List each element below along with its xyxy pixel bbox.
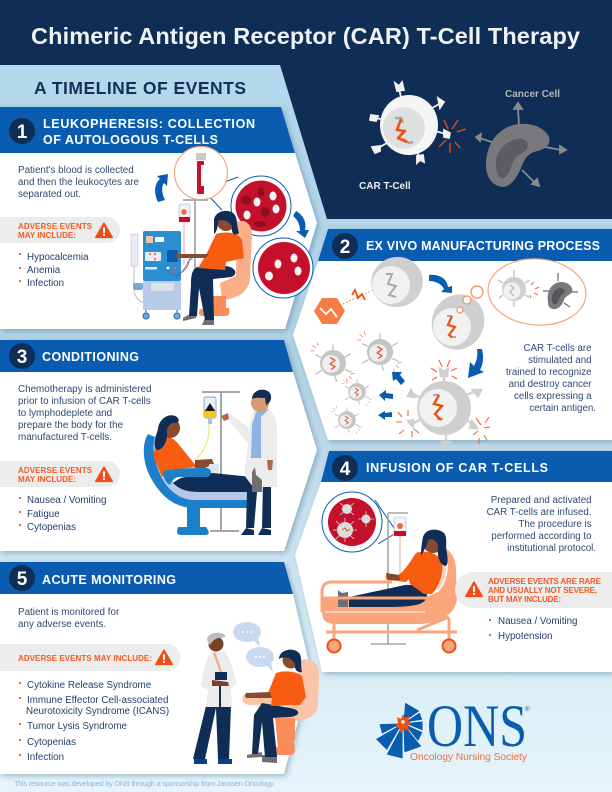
panel body — [293, 229, 612, 440]
text block: Patient's blood is collected — [18, 165, 134, 176]
text block: separated out. — [18, 189, 81, 200]
list: adverse events — [489, 616, 578, 642]
text block: Prepared and activated — [491, 495, 592, 506]
text block: CAR T-cells are infused. — [487, 507, 592, 518]
label: CAR T-Cell: CAR T-Cell — [359, 181, 411, 192]
heading: OF AUTOLOGOUS T-CELLS — [43, 133, 218, 147]
text block: trained to recognize — [506, 367, 592, 378]
logo: ONS — [375, 693, 530, 763]
adverse events pill: MAY INCLUDE: — [18, 475, 76, 484]
list: adverse events: Anemia — [27, 265, 61, 276]
label: Cancer Cell: Cancer Cell — [505, 89, 560, 100]
cell 2 with vesicles — [423, 286, 493, 358]
list: adverse events — [19, 680, 169, 763]
adverse events pill — [0, 461, 120, 487]
text block: Chemotherapy is administered — [18, 384, 152, 395]
clinician — [221, 390, 277, 535]
text block: certain antigen. — [529, 403, 596, 414]
number badge — [9, 118, 35, 144]
bed frame — [322, 582, 457, 652]
magnified blood sample 1 — [231, 176, 291, 236]
footer credit: This resource was developed by ONS through a sponsorship from Janssen Oncology. — [14, 779, 275, 788]
cell 1 — [364, 250, 430, 314]
panel 4: infusion of CAR T-cells — [295, 451, 612, 672]
patient — [338, 530, 448, 607]
icon: CAR T-cell — [370, 82, 466, 163]
chair — [242, 659, 319, 755]
text block: and destroy cancer — [509, 379, 592, 390]
list: adverse events: Fatigue — [27, 509, 60, 520]
text block: Patient is monitored for — [18, 607, 120, 618]
list: adverse events: Cytopenias — [27, 522, 76, 533]
panel body — [0, 340, 317, 551]
bed backrest — [322, 548, 457, 624]
arrow — [429, 275, 452, 293]
list: adverse events — [19, 495, 107, 533]
heading: a timeline of events: A TIMELINE OF EVENTS — [34, 78, 246, 98]
adverse events pill — [0, 217, 120, 243]
text block: any adverse events. — [18, 619, 106, 630]
IV pole and bag — [194, 392, 240, 531]
logo: ONS: ® — [525, 706, 530, 713]
text block: and then the leukocytes are — [18, 177, 139, 188]
heading: CONDITIONING — [42, 350, 139, 364]
IV pole and bag — [371, 513, 408, 644]
clinician — [193, 633, 237, 764]
icon: cancer cell — [476, 103, 566, 187]
chair — [199, 221, 252, 316]
list: adverse events: Tumor Lysis Syndrome — [27, 721, 128, 732]
number badge: 1 — [17, 122, 28, 143]
list: adverse events: Infection — [27, 752, 64, 763]
text block: CAR T-cells are — [523, 343, 592, 354]
illustration: patient and clinician with chemotherapy — [144, 390, 277, 535]
panel 5: acute monitoring — [0, 562, 319, 774]
heading: INFUSION OF CAR T-CELLS — [366, 461, 548, 475]
apheresis machine — [131, 231, 181, 319]
title: Chimeric Antigen Receptor (CAR) T-Cell Therapy — [31, 23, 580, 49]
illustration: clinician talking with patient — [193, 622, 319, 764]
list: adverse events: Immune Effector Cell-associated — [27, 695, 168, 706]
adverse events pill: MAY INCLUDE: — [18, 231, 76, 240]
magnifier: blood tube — [174, 146, 238, 210]
diagram: manufacturing steps — [311, 250, 588, 447]
heading: ACUTE MONITORING — [42, 573, 176, 587]
adverse events pill: BUT MAY INCLUDE: — [488, 595, 561, 604]
list: adverse events: Infection — [27, 278, 64, 289]
adverse events pill: ADVERSE EVENTS MAY INCLUDE: — [18, 654, 152, 663]
number badge — [9, 565, 35, 591]
panel body — [295, 451, 612, 672]
adverse events pill: ADVERSE EVENTS — [18, 222, 93, 231]
society name: Oncology Nursing Society — [410, 752, 528, 763]
text block: manufactured T-cells. — [18, 432, 112, 443]
magnified blood sample 2 — [253, 238, 313, 298]
patient — [245, 650, 306, 763]
icon: ONS fan mark — [375, 702, 423, 759]
IV pole and bag — [179, 200, 208, 312]
icon: antigen receptor gene hexagon — [314, 285, 383, 324]
illustration: patient in bed receiving infusion — [322, 492, 457, 652]
number badge: 4 — [340, 459, 351, 480]
header bar — [0, 562, 293, 594]
text block: to lymphodeplete and — [18, 408, 112, 419]
small arrows — [378, 372, 405, 420]
callout: T-cell recognizes cancer cell — [486, 256, 588, 328]
number badge — [332, 455, 358, 481]
arrow down — [293, 211, 309, 238]
text block: cells expressing a — [514, 391, 592, 402]
header bar — [318, 229, 612, 261]
text block: institutional protocol. — [507, 543, 596, 554]
header bar — [321, 451, 612, 482]
adverse events pill — [0, 644, 180, 671]
activated T-cell — [396, 360, 490, 447]
arrow — [468, 349, 484, 378]
header bar — [0, 107, 295, 153]
number badge — [9, 343, 35, 369]
number badge: 2 — [340, 237, 350, 258]
wordmark: ONS — [427, 693, 527, 759]
list: adverse events: Cytopenias — [27, 737, 76, 748]
adverse events pill: ADVERSE EVENTS ARE RARE — [488, 577, 602, 586]
header: dark navy banner — [0, 0, 612, 219]
adverse events pill — [455, 572, 612, 608]
text block: The procedure is — [518, 519, 592, 530]
speech bubbles — [233, 622, 274, 672]
illustration: apheresis — [131, 146, 313, 325]
list: adverse events: Nausea / Vomiting — [27, 495, 107, 506]
panel 3: conditioning — [0, 340, 317, 551]
adverse events pill: ADVERSE EVENTS — [18, 466, 93, 475]
text block: prior to infusion of CAR T-cells — [18, 396, 151, 407]
patient — [168, 211, 244, 325]
panel body — [0, 562, 311, 774]
list: adverse events: Hypocalcemia — [27, 252, 89, 263]
magnified CAR T-cells in blood — [322, 492, 396, 552]
list: adverse events: Hypotension — [498, 631, 552, 642]
heading: LEUKOPHERESIS: COLLECTION — [43, 117, 255, 131]
text block: performed according to — [491, 531, 592, 542]
adverse events pill: AND USUALLY NOT SEVERE, — [488, 586, 597, 595]
number badge: 5 — [17, 569, 28, 590]
panel body — [0, 107, 317, 329]
panel 1: leukopheresis — [0, 107, 317, 329]
arrow up — [155, 174, 168, 202]
list: adverse events: Cytokine Release Syndrome — [27, 680, 152, 691]
chair — [144, 434, 252, 535]
header bar — [0, 340, 293, 372]
list: adverse events: Nausea / Vomiting — [498, 616, 578, 627]
number badge — [332, 233, 358, 259]
number badge: 3 — [17, 347, 27, 368]
patient — [154, 415, 252, 492]
list: adverse events — [19, 252, 89, 289]
heading: EX VIVO MANUFACTURING PROCESS — [366, 239, 600, 253]
small daughter cells — [311, 332, 401, 434]
panel 2: ex vivo manufacturing process — [293, 229, 612, 447]
list: adverse events: Neurotoxicity Syndrome (ICANS) — [26, 706, 169, 717]
text block: prepare the body for the — [18, 420, 124, 431]
text block: stimulated and — [528, 355, 592, 366]
illustration: CAR T-cell attacking cancer cell — [359, 82, 566, 192]
